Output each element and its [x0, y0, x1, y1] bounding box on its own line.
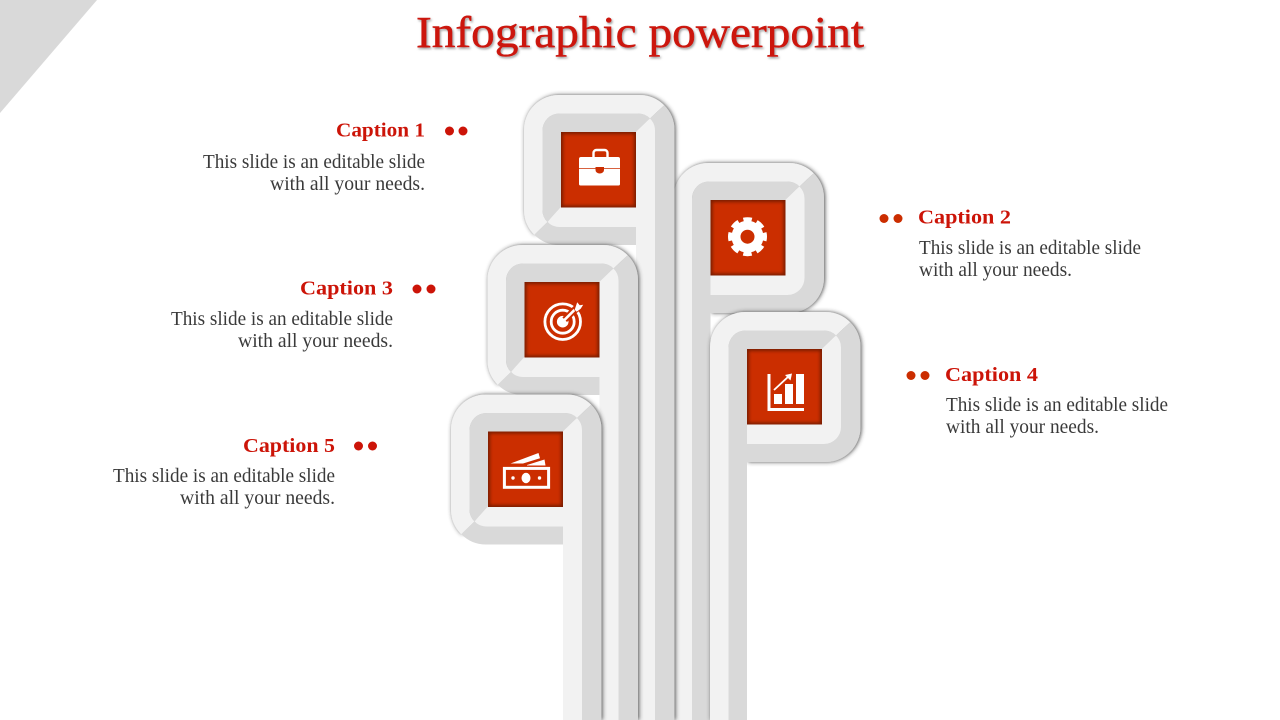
bullet dots 5	[354, 442, 377, 450]
body text 3: with all your needs.	[238, 330, 393, 352]
caption 3	[171, 278, 436, 352]
red square: target	[524, 282, 600, 358]
caption 4	[906, 364, 1168, 438]
red square: chart	[747, 349, 822, 424]
panel: chart ribbon	[710, 312, 860, 720]
body text 5	[113, 465, 335, 509]
body text 3: This slide is an editable slide	[171, 308, 393, 330]
body text 4: This slide is an editable slide	[946, 394, 1168, 416]
caption 1: Caption 1	[336, 120, 425, 142]
body text 4: with all your needs.	[946, 416, 1099, 438]
bullet dots 4	[906, 371, 930, 380]
caption 1	[203, 120, 468, 195]
icon: banknotes	[504, 453, 549, 487]
body text 1: with all your needs.	[270, 173, 425, 195]
body text 4	[946, 394, 1168, 438]
panel: target ribbon	[488, 245, 638, 720]
caption 5	[113, 435, 377, 509]
body text 5: with all your needs.	[180, 487, 335, 509]
bullet dots 2	[880, 214, 902, 223]
caption 4: Caption 4	[945, 364, 1038, 386]
red square: gear	[710, 200, 786, 276]
bullet dots 1	[445, 126, 468, 136]
body text 5: This slide is an editable slide	[113, 465, 335, 487]
icon: briefcase	[579, 150, 620, 186]
body text 2: with all your needs.	[919, 259, 1072, 281]
corner triangle	[0, 0, 97, 113]
caption 5: Caption 5	[243, 435, 335, 457]
body text 2: This slide is an editable slide	[919, 237, 1141, 259]
body text 1	[203, 151, 425, 195]
panel: money ribbon	[451, 394, 602, 720]
panel: briefcase ribbon	[524, 95, 674, 720]
icon: growth chart	[768, 374, 804, 411]
red square: briefcase	[561, 132, 636, 208]
icon: gear	[730, 219, 765, 254]
caption 2: Caption 2	[918, 206, 1011, 228]
body text 2	[919, 237, 1141, 281]
icon: target with arrow	[545, 301, 584, 340]
body text 1: This slide is an editable slide	[203, 151, 425, 173]
caption 2	[880, 206, 1141, 281]
bullet dots 3	[412, 284, 436, 294]
body text 3	[171, 308, 393, 352]
red square: money	[488, 432, 563, 507]
caption 3: Caption 3	[300, 278, 393, 300]
title: Infographic powerpoint	[416, 8, 864, 57]
panel: gear ribbon	[674, 163, 824, 720]
